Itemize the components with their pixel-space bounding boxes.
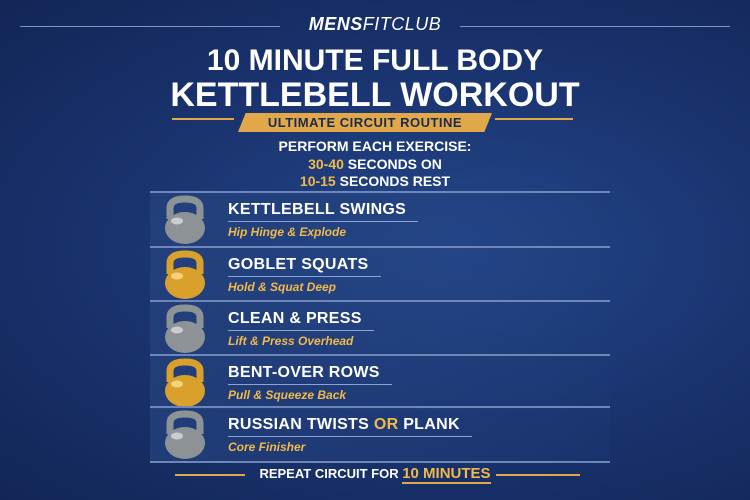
brand: MENSFITCLUB xyxy=(309,14,441,34)
footer: REPEAT CIRCUIT FOR 10 MINUTES xyxy=(259,465,491,482)
row 2: Hold & Squat Deep xyxy=(228,280,336,294)
row 1 xyxy=(150,191,610,246)
row 4: Pull & Squeeze Back xyxy=(228,388,346,402)
row 2: GOBLET SQUATS xyxy=(228,256,368,273)
row 5: Core Finisher xyxy=(228,440,305,454)
perform text: 10-15 SECONDS REST xyxy=(300,173,450,189)
title: KETTLEBELL WORKOUT xyxy=(170,76,580,114)
perform text: PERFORM EACH EXERCISE: xyxy=(279,138,471,154)
banner xyxy=(238,113,492,132)
row 4 xyxy=(150,354,610,409)
row 5 xyxy=(150,406,610,463)
perform text: 30-40 SECONDS ON xyxy=(308,156,442,172)
row 3: CLEAN & PRESS xyxy=(228,310,362,327)
title xyxy=(170,44,580,114)
row 1: KETTLEBELL SWINGS xyxy=(228,201,406,218)
row 3 xyxy=(150,300,610,355)
row 3: Lift & Press Overhead xyxy=(228,334,353,348)
row 1: Hip Hinge & Explode xyxy=(228,225,346,239)
exercise list xyxy=(150,191,610,463)
banner: ULTIMATE CIRCUIT ROUTINE xyxy=(268,115,462,130)
row 2 xyxy=(150,246,610,301)
perform text xyxy=(279,138,471,189)
title: 10 MINUTE FULL BODY xyxy=(207,44,543,77)
row 5: RUSSIAN TWISTS OR PLANK xyxy=(228,416,460,433)
row 4: BENT-OVER ROWS xyxy=(228,364,380,381)
